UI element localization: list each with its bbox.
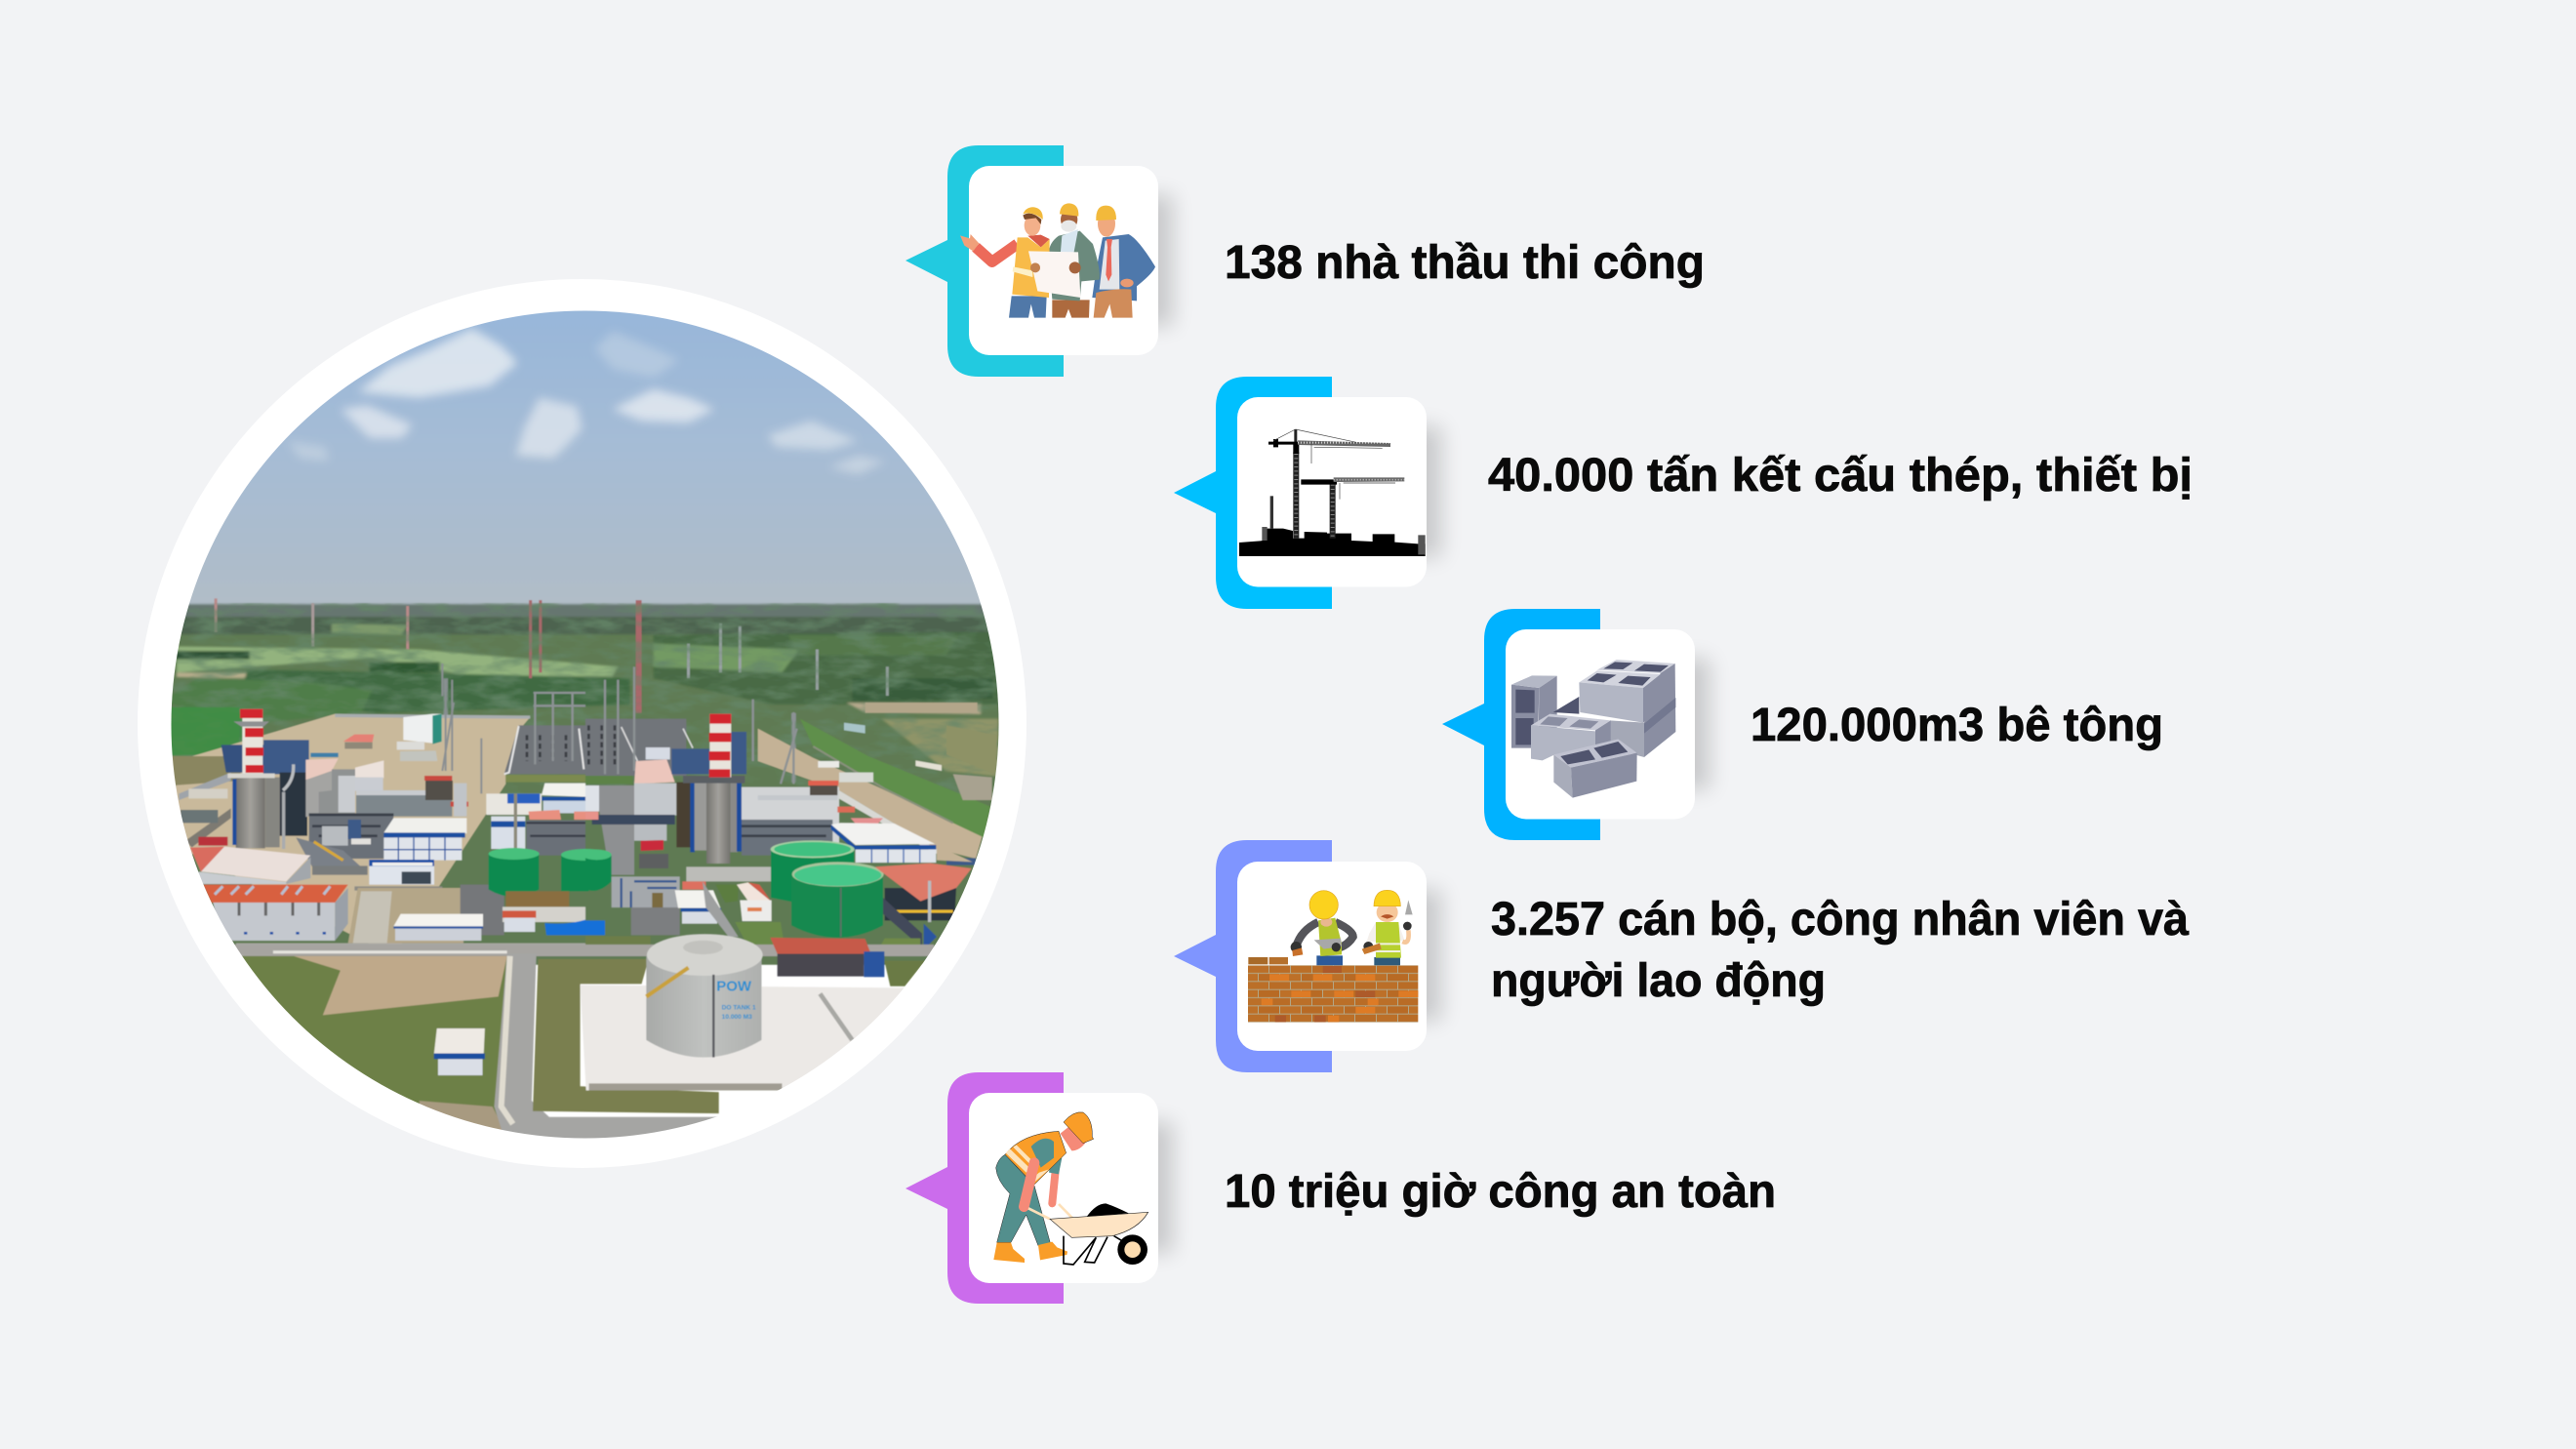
card: white bbox=[1237, 397, 1427, 587]
text: safe hours: 10 triệu giờ công an toàn bbox=[1225, 1166, 1776, 1218]
diesel storage tank bbox=[646, 934, 763, 1058]
text: contractors: 138 nhà thầu thi công bbox=[1225, 237, 1705, 289]
text: workforce bbox=[1491, 894, 2189, 1007]
item 2: steel tonnage bbox=[1174, 377, 1441, 609]
icon: concrete blocks bbox=[1511, 660, 1675, 798]
green tanks left bbox=[489, 854, 539, 897]
icon: three engineers reading plan bbox=[960, 203, 1155, 318]
bracket: cyan bbox=[906, 145, 1064, 377]
bracket: azure bbox=[1442, 609, 1600, 840]
right half of plant bbox=[583, 666, 997, 956]
card: white bbox=[969, 166, 1158, 355]
diesel storage tank: 10.000 M3 bbox=[722, 1014, 752, 1021]
lower section of site bbox=[234, 933, 935, 1138]
card: white bbox=[1506, 629, 1695, 820]
bracket: sky blue bbox=[1174, 377, 1332, 609]
left half of plant bbox=[171, 664, 610, 956]
item 1: contractors bbox=[906, 145, 1173, 377]
bracket: violet bbox=[906, 1072, 1064, 1304]
icon: worker pushing wheelbarrow bbox=[993, 1112, 1148, 1265]
text: steel tonnage: 40.000 tấn kết cấu thép, thiết bị bbox=[1488, 450, 2193, 502]
item 4: workforce bbox=[1174, 840, 1441, 1072]
card: white bbox=[969, 1093, 1158, 1283]
icon: tower cranes silhouette bbox=[1239, 429, 1426, 556]
left stack bbox=[221, 709, 309, 849]
diesel storage tank: DO TANK 1 bbox=[722, 1004, 756, 1011]
diesel storage tank: POW bbox=[716, 980, 752, 994]
card: white bbox=[1237, 862, 1427, 1051]
item 5: safe hours bbox=[906, 1072, 1173, 1304]
bracket: periwinkle bbox=[1174, 840, 1332, 1072]
icon: bricklayers at wall bbox=[1248, 890, 1418, 1023]
right stack bbox=[671, 714, 746, 864]
text: concrete: 120.000m3 bê tông bbox=[1751, 700, 2163, 751]
item 3: concrete bbox=[1442, 609, 1710, 840]
green tanks right bbox=[771, 849, 854, 906]
text: workforce: 3.257 cán bộ, công nhân viên và bbox=[1491, 894, 2189, 946]
aerial photo of power plant bbox=[162, 302, 1010, 1147]
white photo ring bbox=[138, 279, 1026, 1168]
text: workforce: người lao động bbox=[1491, 955, 1826, 1007]
